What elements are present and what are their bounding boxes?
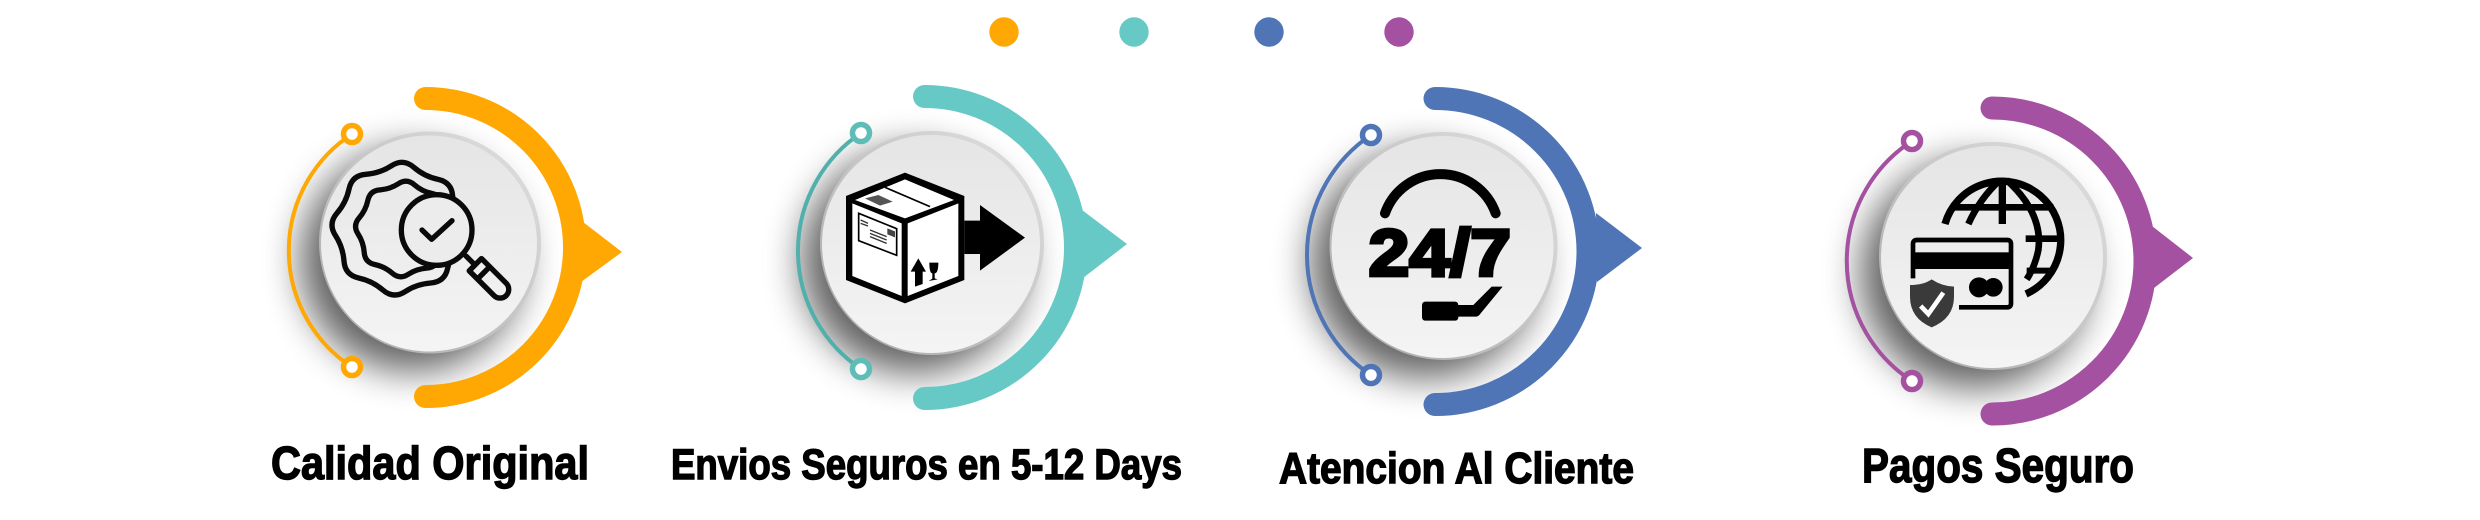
legend dots — [989, 17, 1414, 47]
icon: 24/7 headset: 24/7 — [1369, 216, 1511, 290]
label: Atencion Al Cliente — [1279, 444, 1634, 493]
panel: calidad original — [271, 98, 622, 489]
panel: atencion al cliente — [1279, 98, 1642, 493]
pointer arc — [1435, 98, 1642, 404]
icon: 24/7 headset — [1369, 174, 1511, 321]
label: Pagos Seguro — [1862, 440, 2134, 493]
icon: badge and magnifier — [327, 158, 512, 302]
disc — [319, 132, 541, 354]
label: Calidad Original — [271, 437, 589, 489]
thin arc with end nodes — [1307, 126, 1380, 384]
thin arc with end nodes — [798, 124, 870, 378]
disc — [1330, 132, 1558, 360]
panel: envios seguros — [671, 96, 1182, 489]
pointer arc — [924, 96, 1127, 398]
disc — [820, 131, 1044, 355]
pointer arc — [1992, 108, 2193, 414]
icon: globe, card and shield — [1910, 178, 2063, 327]
disc — [1879, 142, 2107, 370]
thin arc with end nodes — [1847, 132, 1920, 390]
pointer arc — [426, 98, 622, 396]
icon: parcel with arrow — [846, 173, 1025, 303]
panel: pagos seguro — [1847, 108, 2193, 493]
label: Envios Seguros en 5-12 Days — [671, 441, 1182, 489]
thin arc with end nodes — [289, 126, 360, 376]
